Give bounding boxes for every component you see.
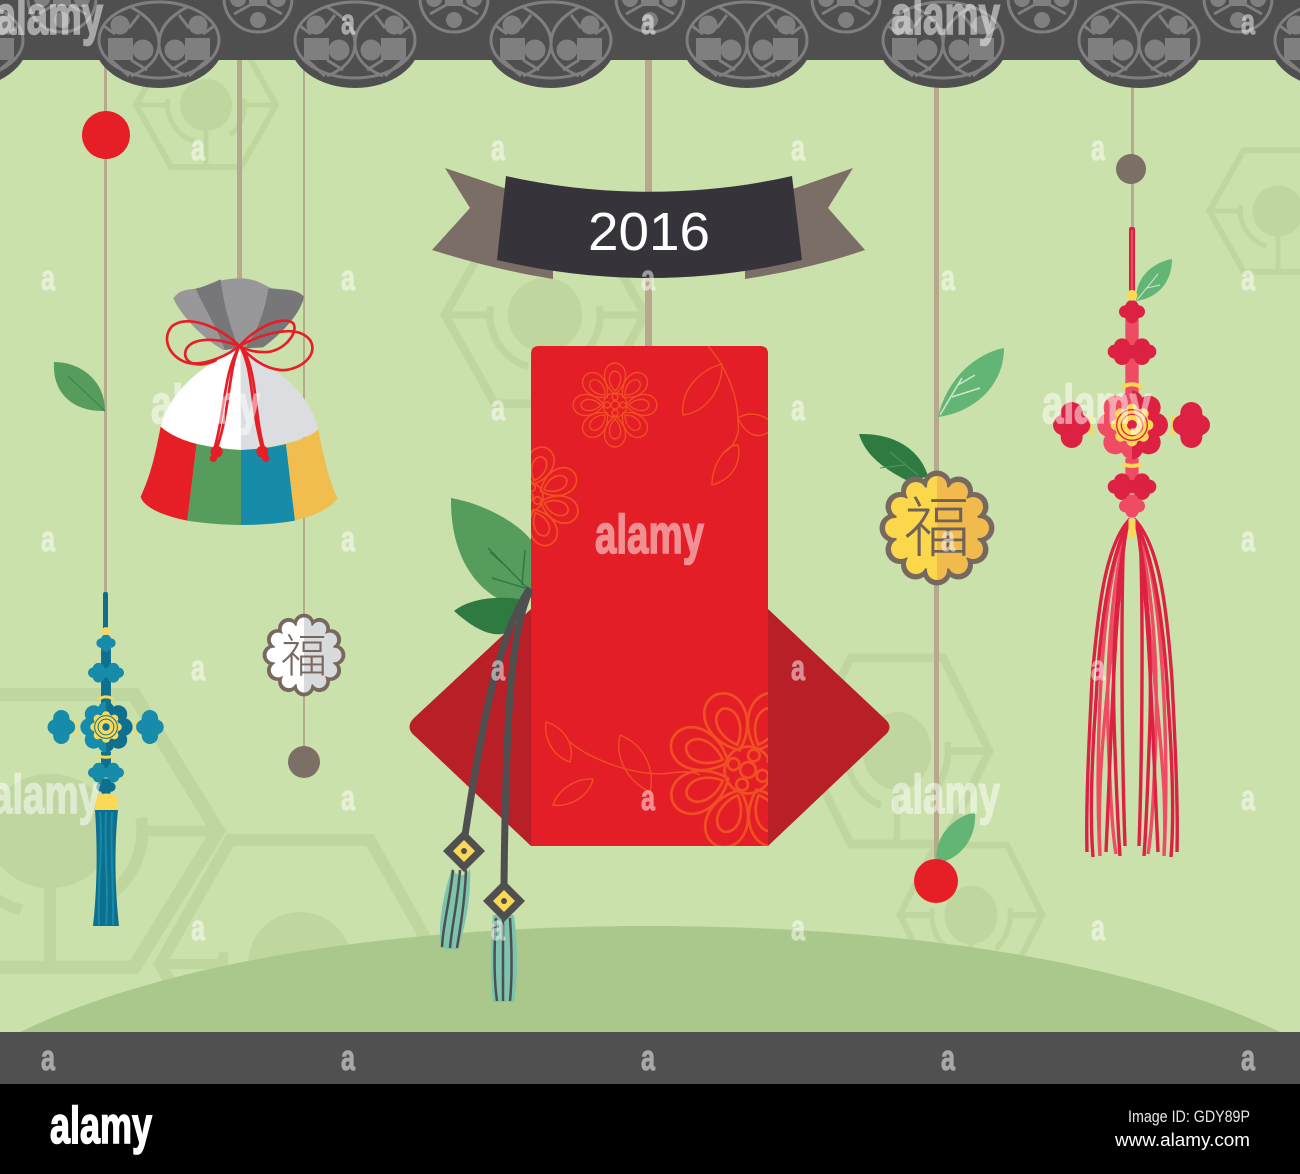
- repeated watermark letters: a: [41, 518, 56, 559]
- repeated watermark letters: a: [191, 907, 206, 948]
- repeated watermark letters: a: [341, 1, 356, 42]
- ribbon banner: [432, 168, 865, 279]
- repeated watermark letters: a: [941, 518, 956, 559]
- repeated watermark letters: a: [491, 907, 506, 948]
- red envelope: [531, 346, 768, 846]
- repeated watermark letters: a: [641, 1, 656, 42]
- repeated watermark letters: a: [41, 1037, 56, 1078]
- bottom black footer: [0, 1084, 1300, 1174]
- leaf on red knot: [1136, 259, 1172, 301]
- repeated watermark letters: a: [791, 907, 806, 948]
- repeated watermark letters: a: [191, 127, 206, 168]
- red bead top left: [82, 111, 130, 159]
- right lower leaves and yellow medallion: [859, 348, 1004, 586]
- large watermark words: alamy: [151, 373, 260, 435]
- lucky pouch: [141, 278, 338, 525]
- repeated watermark letters: a: [1091, 647, 1106, 688]
- tassel cords with diamonds: [440, 588, 530, 1002]
- repeated watermark letters: a: [1241, 1037, 1256, 1078]
- repeated watermark letters: a: [491, 127, 506, 168]
- bottom right leaf: [936, 812, 975, 863]
- green leaves by envelope: [451, 498, 531, 634]
- repeated watermark letters: a: [491, 647, 506, 688]
- repeated watermark letters: a: [791, 647, 806, 688]
- repeated watermark letters: a: [941, 257, 956, 298]
- large watermark words: alamy: [1042, 373, 1151, 435]
- footer image id: Image ID: GDY89P: [1128, 1107, 1250, 1126]
- brown bead right: [1116, 154, 1146, 184]
- repeated watermark letters: a: [491, 387, 506, 428]
- repeated watermark letters: a: [41, 257, 56, 298]
- teal tassel: [93, 794, 119, 926]
- repeated watermark letters: a: [341, 777, 356, 818]
- repeated watermark letters: a: [341, 1037, 356, 1078]
- footer logo: alamy: [50, 1097, 152, 1155]
- repeated watermark letters: a: [641, 1037, 656, 1078]
- small silver lucky medallion: 福: [281, 620, 327, 686]
- repeated watermark letters: a: [1241, 518, 1256, 559]
- right lower leaves and yellow medallion: 福: [904, 475, 970, 571]
- repeated watermark letters: a: [1091, 907, 1106, 948]
- repeated watermark letters: a: [1241, 1, 1256, 42]
- brown bead left: [288, 746, 320, 778]
- large watermark words: alamy: [595, 503, 704, 565]
- repeated watermark letters: a: [191, 647, 206, 688]
- red ribbon bow: [167, 321, 312, 453]
- repeated watermark letters: a: [641, 257, 656, 298]
- repeated watermark letters: a: [791, 387, 806, 428]
- small silver lucky medallion: [263, 614, 345, 696]
- year label: 2016: [588, 202, 710, 262]
- large watermark words: alamy: [891, 763, 1000, 825]
- left leaf: [54, 362, 105, 411]
- teal knot ornament: [48, 592, 164, 926]
- repeated watermark letters: a: [341, 518, 356, 559]
- roof tile band: [0, 0, 1300, 88]
- floral line pattern: [531, 346, 768, 846]
- red knot ornament: [1053, 227, 1210, 518]
- hanging cords: [104, 60, 1134, 880]
- red bead bottom right: [914, 859, 958, 903]
- footer url: www.alamy.com: [1114, 1130, 1250, 1150]
- repeated watermark letters: a: [1241, 257, 1256, 298]
- repeated watermark letters: a: [1241, 777, 1256, 818]
- repeated watermark letters: a: [341, 257, 356, 298]
- large watermark words: [0, 0, 1151, 825]
- repeated watermark letters: a: [791, 127, 806, 168]
- repeated watermark letters: a: [1091, 127, 1106, 168]
- red tassel: [1087, 519, 1177, 857]
- envelope wings: [409, 609, 890, 846]
- bottom grey band: [0, 1032, 1300, 1084]
- repeated watermark letters: a: [641, 777, 656, 818]
- ground hill: [20, 926, 1280, 1032]
- repeated watermark letters: a: [941, 1037, 956, 1078]
